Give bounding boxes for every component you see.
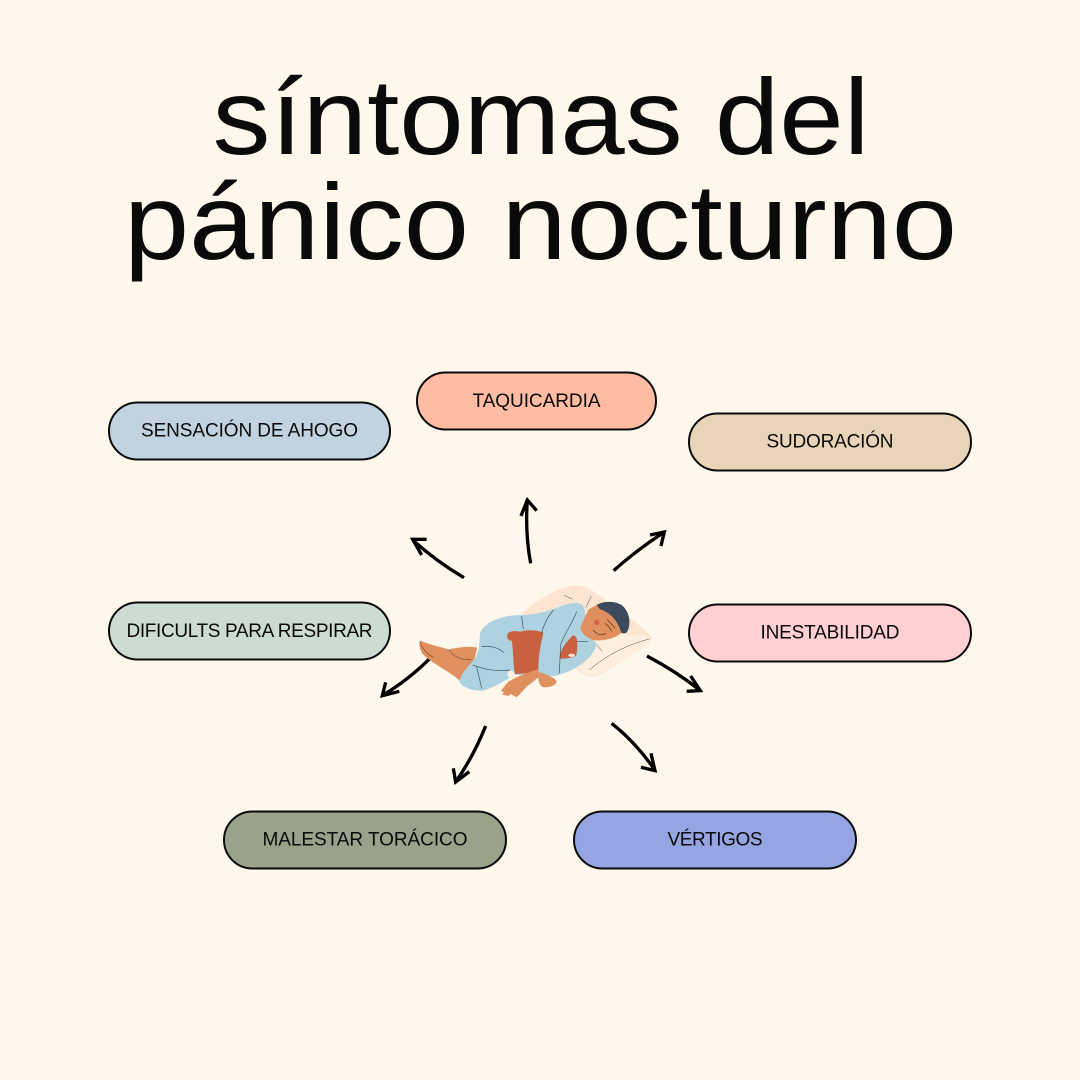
icon: head and face xyxy=(581,605,623,640)
icon: pajamas xyxy=(459,603,597,691)
icon: sleeve xyxy=(538,604,583,676)
icon: hair xyxy=(597,602,629,633)
pill: sudoración xyxy=(689,414,971,470)
title: pánico nocturno xyxy=(124,161,957,282)
icon: teddy bear xyxy=(507,630,577,678)
pill: sensación de ahogo xyxy=(109,402,390,460)
pill: inestabilidad: INESTABILIDAD xyxy=(760,622,900,644)
pill: vértigos xyxy=(574,812,856,868)
arrow: to sudoración xyxy=(614,532,664,571)
title: síntomas del xyxy=(212,56,870,177)
title xyxy=(124,56,957,282)
pill: dificultades para respirar xyxy=(109,602,390,660)
pill: inestabilidad xyxy=(689,604,971,662)
pill: taquicardia xyxy=(417,372,656,430)
pill: sensación de ahogo: SENSACIÓN DE AHOGO xyxy=(141,420,358,442)
illustration: person sleeping hugging a teddy bear xyxy=(419,585,653,697)
icon: legs and feet xyxy=(419,641,477,681)
pill: vértigos: VÉRTIGOS xyxy=(668,830,762,850)
pill: malestar torácico xyxy=(224,812,506,868)
arrow: to sensación de ahogo xyxy=(413,539,464,578)
pill: sudoración: SUDORACIÓN xyxy=(766,430,894,452)
pill: malestar torácico: MALESTAR TORÁCICO xyxy=(262,830,468,850)
arrow: to dificultades para respirar xyxy=(382,658,430,696)
pill: dificultades para respirar: DIFICULTS PARA RESPIRAR xyxy=(126,621,372,642)
arrow: to vértigos xyxy=(612,723,655,771)
pill: taquicardia: TAQUICARDIA xyxy=(472,391,601,412)
arrow: to inestabilidad xyxy=(647,656,700,691)
icon: hands xyxy=(501,669,557,697)
arrow: to taquicardia xyxy=(521,500,537,563)
icon: pillow xyxy=(522,585,653,677)
arrow: to malestar torácico xyxy=(453,726,486,782)
